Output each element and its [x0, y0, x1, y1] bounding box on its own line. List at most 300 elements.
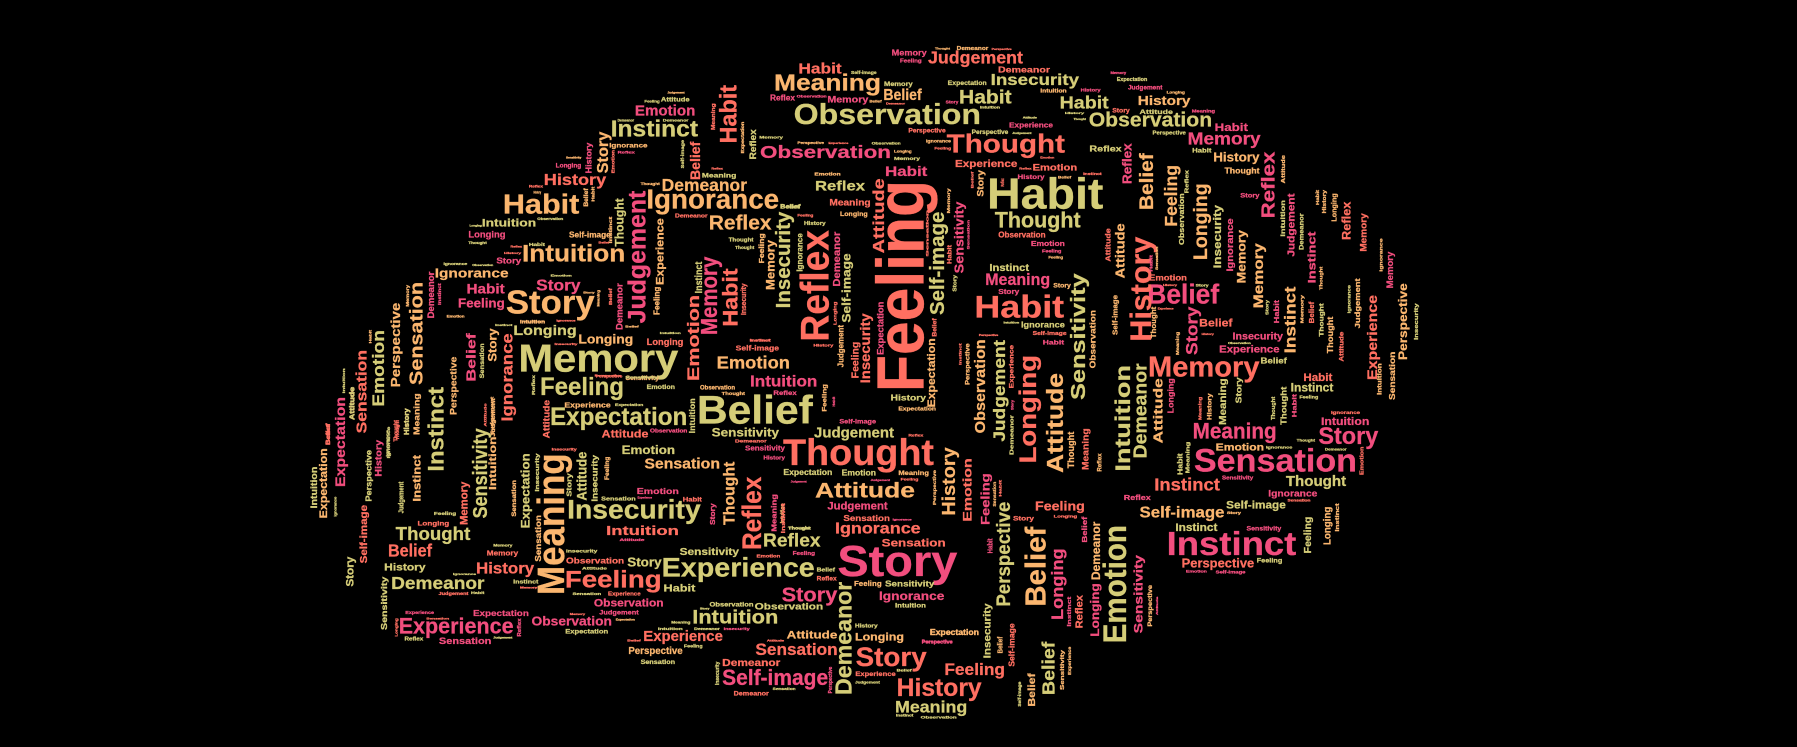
words: lower-left lobe: Observation — [709, 602, 754, 609]
words: lower centre of the brain: Story — [856, 642, 927, 672]
words: lower centre of the brain: Observation — [921, 714, 958, 719]
words: lower centre of the brain: Judgement — [814, 426, 894, 442]
words: centre-right band — [958, 273, 1397, 473]
words: lower-left lobe: Attitude — [573, 452, 589, 501]
words: lower centre of the brain: Intuition — [780, 503, 786, 523]
words: upper-left lobe: Habit — [719, 268, 743, 327]
words: lower centre of the brain: Emotion — [842, 469, 876, 478]
words: lower centre of the brain: Ignorance — [835, 520, 921, 537]
words: centre-right band: Ignorance — [1331, 410, 1361, 415]
words: temporal lobe and cerebellum: Perspective — [1147, 584, 1154, 627]
words: top centre of the brain: Expectation — [875, 301, 885, 355]
words: lower-left lobe: Intuition — [692, 607, 778, 628]
word: Sensation: Sensation — [1194, 442, 1357, 478]
words: top centre of the brain: Longing — [894, 149, 912, 153]
words: centre-right band: Feeling — [1299, 394, 1318, 399]
words: temporal lobe and cerebellum: Sensitivity — [1060, 649, 1066, 690]
words: temporal lobe and cerebellum: Self-image — [1226, 499, 1286, 511]
words: centre-right band: Story — [1010, 400, 1014, 410]
word: Longing: Longing — [1015, 355, 1042, 463]
words: top centre of the brain: Demeanor — [957, 46, 988, 52]
words: centre-left band: Longing — [647, 337, 684, 347]
words: top centre of the brain: Experience — [955, 159, 1018, 170]
words: lower-left lobe: Insecurity — [535, 453, 541, 492]
words: centre-right band: Thought — [1066, 432, 1076, 468]
words: temporal lobe and cerebellum: Feeling — [1257, 558, 1282, 565]
words: temporal lobe and cerebellum: Longing — [1054, 513, 1078, 518]
words: centre-left band: Feeling — [540, 373, 624, 401]
words: centre-left band: Habit — [369, 329, 373, 343]
words: upper-right lobe: Belief — [1309, 301, 1316, 323]
words: lower-left lobe: Perspective — [364, 449, 374, 502]
words: lower-left lobe: Demeanor — [734, 691, 769, 698]
words: centre-left band: Sensitivity — [712, 426, 779, 440]
words: top centre of the brain — [760, 46, 1079, 407]
words: upper-right lobe: Observation — [1179, 193, 1186, 245]
words: centre-left band: Sensitivity — [626, 376, 660, 382]
words: upper-right lobe: Reflex — [1089, 144, 1122, 154]
words: lower-left lobe: Attitude — [620, 537, 646, 542]
words: top centre of the brain: Longing — [840, 211, 868, 218]
words: centre-right band: Emotion — [1216, 443, 1264, 454]
words: top centre of the brain: Memory — [827, 94, 869, 104]
words: centre-left band: Observation — [650, 429, 687, 435]
words: centre-right band: Meaning — [1080, 428, 1090, 470]
words: upper-left lobe: Instinct — [608, 215, 613, 243]
words: top centre of the brain: Ignorance — [926, 139, 951, 144]
words: top centre of the brain: Sensitivity — [951, 201, 966, 273]
words: upper-right lobe: Emotion — [1149, 274, 1187, 283]
words: temporal lobe and cerebellum: Self-image — [1140, 505, 1225, 521]
words: upper-right lobe: History — [1138, 93, 1191, 108]
words: lower-left lobe: Sensation — [601, 496, 636, 503]
words: upper-right lobe: Emotion — [1031, 239, 1065, 248]
words: temporal lobe and cerebellum: Self-image — [1017, 681, 1022, 707]
words: upper-right lobe: Belief — [1136, 152, 1157, 210]
words: upper-left lobe: Longing — [470, 225, 482, 228]
words: top centre of the brain: Feeling — [850, 342, 861, 378]
words: lower-left lobe: Instinct — [412, 454, 424, 502]
words: upper-left lobe: Demeanor — [614, 283, 625, 330]
words: lower centre of the brain: Sensation — [843, 513, 890, 523]
words: lower-left lobe: History — [384, 562, 426, 573]
words: lower-left lobe: Memory — [459, 481, 471, 525]
words: upper-right lobe: History — [1202, 332, 1215, 336]
words: lower centre of the brain: Habit — [831, 396, 836, 407]
words: top centre of the brain: Insecurity — [773, 212, 795, 308]
words: upper-left lobe: Belief — [687, 141, 703, 180]
words: centre-left band: Reflex — [773, 390, 797, 397]
words: lower-left lobe: Sensitivity — [380, 576, 389, 630]
words: centre-left band: Thought — [722, 391, 746, 396]
words: lower-left lobe: Observation — [755, 602, 823, 612]
words: centre-right band: Instinct — [958, 342, 963, 365]
words: top centre of the brain: Story — [953, 275, 959, 292]
words: lower centre of the brain: Expectation — [898, 407, 936, 413]
words: lower centre of the brain: Intuition — [895, 603, 926, 609]
word: Feeling (lower left): Feeling — [565, 567, 662, 593]
words: top centre of the brain: Insecurity — [857, 313, 873, 383]
words: upper-left lobe: Sensitivity — [625, 376, 658, 379]
words: upper-left lobe: History — [504, 251, 522, 255]
words: upper-left lobe: Thought — [641, 182, 661, 186]
words: temporal lobe and cerebellum: Longing — [1089, 583, 1102, 637]
words: centre-right band: Thought — [1280, 386, 1289, 425]
words: centre-left band: Meaning — [411, 393, 421, 435]
words: upper-right lobe: History — [1018, 174, 1045, 181]
words: lower centre of the brain: Sensation — [882, 538, 946, 550]
words: upper-left lobe: Emotion — [610, 149, 616, 173]
words: upper-left lobe: Longing — [468, 230, 506, 240]
words: upper-right lobe: Belief — [1199, 317, 1233, 330]
words: upper-right lobe: Thought — [1149, 306, 1158, 338]
words: centre-right band: Intuition — [1378, 363, 1384, 395]
words: top centre of the brain: Self-image — [927, 212, 949, 315]
words: upper-left lobe: Demeanor — [618, 119, 635, 123]
words: lower-left lobe: Feeling — [605, 456, 611, 480]
words: lower-left lobe: Demeanor — [694, 627, 721, 631]
words: top centre of the brain: Emotion — [814, 172, 841, 177]
words: centre-left band: Attitude — [349, 387, 356, 420]
words: centre-left band: Judgement — [489, 396, 494, 435]
words: temporal lobe and cerebellum: Belief — [1027, 673, 1038, 707]
words: upper-left lobe: Emotion — [635, 104, 695, 119]
word: Habit (left): Habit — [503, 189, 580, 220]
words: lower-left lobe: Insecurity — [715, 661, 721, 685]
words: lower-left lobe: Perspective — [628, 646, 683, 657]
word: Meaning (vertical): Meaning — [530, 453, 573, 595]
words: upper-left lobe: Ignorance — [609, 142, 648, 149]
words: lower-left lobe: Memory — [570, 612, 586, 616]
words: temporal lobe and cerebellum: Feeling — [1303, 517, 1314, 553]
words: lower centre of the brain: Belief — [817, 568, 835, 574]
words: upper-left lobe: Instinct — [495, 323, 514, 327]
words: lower-left lobe: Story — [344, 557, 357, 587]
word: Habit (salmon): Habit — [974, 289, 1064, 324]
words: centre-right band: Reflex — [1097, 453, 1104, 472]
words: upper-right lobe: History — [1081, 87, 1101, 93]
words: lower centre of the brain: Longing — [855, 632, 904, 644]
words: centre-left band: Story — [486, 328, 500, 362]
words: lower centre of the brain: Habit — [999, 479, 1003, 497]
words: top centre of the brain: History — [804, 221, 826, 227]
words: lower-left lobe: Judgement — [398, 481, 405, 513]
words: centre-left band: Insecurity — [552, 448, 577, 452]
words: upper-left lobe: Story — [583, 291, 595, 294]
words: upper-right lobe: Reflex — [1019, 166, 1032, 170]
words: top centre of the brain: Meaning — [829, 198, 871, 208]
words: lower-left lobe: Observation — [532, 615, 612, 629]
words: upper-left lobe: Emotion — [447, 315, 465, 318]
words: upper-left lobe: Reflex — [709, 212, 772, 234]
words: top centre of the brain: Demeanor — [998, 66, 1050, 75]
words: lower centre of the brain: Insecurity — [983, 603, 994, 658]
words: lower-left lobe: Expectation — [318, 448, 330, 518]
words: upper-right lobe: Memory — [1235, 229, 1249, 283]
words: centre-left band: Emotion — [622, 443, 675, 457]
words: upper-left lobe: History — [544, 170, 607, 189]
words: upper-left lobe: Demeanor — [425, 271, 436, 318]
words: upper-left lobe: Memory — [765, 239, 778, 290]
words: temporal lobe and cerebellum: Story — [1227, 511, 1241, 515]
words: top centre of the brain: History — [813, 343, 834, 348]
words: lower-left lobe: Ignorance — [453, 572, 476, 576]
words: upper-right lobe: Habit — [1315, 189, 1320, 205]
words: lower centre of the brain: Self-image — [839, 419, 877, 425]
words: upper-right lobe: Insecurity — [1212, 204, 1224, 268]
words: lower centre of the brain: History — [938, 447, 959, 516]
words: temporal lobe and cerebellum: Ignorance — [1268, 489, 1317, 500]
words: temporal lobe and cerebellum: Story — [1013, 516, 1034, 523]
words: lower-left lobe: Belief — [326, 423, 332, 445]
words: temporal lobe and cerebellum: Reflex — [1124, 493, 1152, 502]
words: upper-right lobe: Habit — [1215, 122, 1248, 134]
words: lower-left lobe: Thought — [788, 526, 812, 530]
words: top centre of the brain: Observation — [797, 94, 827, 98]
words: centre-right band: Thought — [1297, 438, 1316, 443]
words: lower centre of the brain — [750, 374, 1016, 719]
words: temporal lobe and cerebellum: Instinct — [1154, 475, 1220, 495]
words: upper-right lobe: Habit — [1192, 148, 1211, 155]
words: upper-right lobe: Intuition — [1280, 200, 1287, 237]
words: temporal lobe and cerebellum: Belief — [1080, 516, 1089, 543]
words: lower centre of the brain: Meaning — [895, 698, 967, 717]
words: lower-left lobe: Self-image — [358, 505, 369, 563]
words: lower-left lobe: Intuition — [487, 436, 498, 490]
words: lower centre of the brain: Attitude — [787, 629, 837, 641]
word: Belief (pink): Belief — [1147, 279, 1220, 309]
words: upper-right lobe: Intuition — [1003, 320, 1020, 324]
words: lower-left lobe: Reflex — [738, 477, 768, 550]
words: upper-right lobe: Attitude — [1140, 109, 1173, 116]
words: upper-right lobe: Self-image — [1110, 295, 1120, 335]
words: lower centre of the brain: Judgement — [855, 679, 881, 684]
words: lower centre of the brain: Perspective — [922, 639, 953, 645]
words: temporal lobe and cerebellum: Longing — [1323, 507, 1334, 545]
words: lower-left lobe: Experience — [643, 629, 723, 645]
words: centre-left band: Intuition — [688, 398, 697, 433]
words: upper-left lobe: Story — [594, 131, 612, 173]
words: top centre of the brain: Insecurity — [991, 72, 1079, 89]
words: upper-left lobe: Expectation — [740, 121, 745, 153]
words: centre-left band: Belief — [326, 425, 332, 445]
words: upper-right lobe: Story — [1183, 306, 1202, 355]
words: lower-left lobe: Expectation — [565, 628, 608, 635]
words: upper-left lobe: History — [584, 142, 594, 173]
words: upper-left lobe: Memory — [759, 135, 784, 139]
words: centre-right band: Meaning — [1198, 396, 1203, 420]
words: upper-left lobe: Habit — [590, 186, 596, 202]
words: top centre of the brain: Reflex — [770, 94, 796, 103]
words: centre-left band: Perspective — [449, 357, 459, 415]
words: lower-left lobe: Habit — [664, 583, 696, 594]
words: upper-right lobe: Instinct — [1083, 172, 1103, 176]
words: top centre of the brain: Memory — [946, 188, 951, 213]
words: centre-right band: Observation — [1088, 310, 1098, 368]
words: upper-left lobe: Thought — [735, 245, 755, 251]
words: centre-left band: Longing — [578, 331, 633, 346]
words: upper-right lobe: Perspective — [1397, 283, 1410, 360]
words: temporal lobe and cerebellum: Instinct — [1335, 503, 1341, 532]
words: top centre of the brain: Belief — [780, 203, 802, 210]
words: upper-right lobe: Feeling — [1042, 249, 1061, 255]
words: top centre of the brain: Judgement — [836, 325, 845, 367]
words: lower-left lobe: Thought — [396, 524, 471, 545]
words: centre-right band: Story — [1234, 377, 1244, 403]
words: upper-right lobe: Perspective — [1153, 131, 1186, 137]
words: lower-left lobe: Story — [627, 556, 662, 569]
words: lower centre of the brain: Expectation — [783, 468, 832, 477]
words: temporal lobe and cerebellum: Emotion — [1360, 447, 1366, 475]
words: upper-right lobe: Habit — [1272, 299, 1281, 323]
words: temporal lobe and cerebellum: Attitude — [1155, 596, 1159, 615]
words: upper-right lobe: Ignorance — [1378, 238, 1384, 272]
words: lower centre of the brain: Sensitivity — [885, 579, 935, 589]
words: lower-left lobe: Observation — [594, 598, 664, 609]
words: upper-right lobe: Experience — [1219, 345, 1280, 356]
words: top centre of the brain: Belief — [933, 318, 939, 337]
words: lower centre of the brain: Judgement — [827, 500, 888, 512]
words: top centre of the brain: Experience — [1009, 120, 1053, 129]
words: upper-left lobe: Feeling — [458, 297, 505, 310]
words: upper-right lobe: Attitude — [1113, 223, 1128, 278]
word: Belief (vertical): Belief — [1020, 526, 1052, 607]
words: centre-right band: Instinct — [1291, 381, 1333, 395]
words: lower-left lobe: Judgement — [439, 591, 469, 597]
words: centre-left band: Ignorance — [499, 333, 516, 422]
words: upper-left lobe: Experience — [654, 218, 667, 285]
words: upper-right lobe: Longing — [1332, 193, 1339, 222]
words: upper-left lobe: Habit — [715, 84, 742, 143]
words: upper-right lobe: Instinct — [1306, 231, 1319, 283]
words: centre-left band: Self-image — [736, 344, 779, 353]
words: upper-right lobe: Attitude — [1339, 331, 1346, 362]
words: temporal lobe and cerebellum: Sensitivity — [1132, 554, 1146, 633]
words: top centre of the brain: Reflex — [1000, 178, 1005, 187]
words: top centre of the brain: Perspective — [972, 130, 1009, 136]
word: Reflex: Reflex — [793, 230, 837, 342]
words: temporal lobe and cerebellum: Sensitivity — [1247, 526, 1282, 533]
words: centre-left band: Perspective — [596, 374, 623, 379]
words: upper-left lobe: Reflex — [618, 150, 636, 154]
words: top centre of the brain: Expectation — [948, 80, 987, 87]
words: centre-left band: Attitude — [602, 428, 648, 440]
words: upper-left lobe: Instinct — [611, 117, 698, 142]
word: History (vertical): History — [1125, 237, 1158, 342]
words: upper-right lobe: Story — [1240, 192, 1260, 199]
words: top centre of the brain: Self-image — [840, 253, 854, 323]
words: upper-right lobe: Self-image — [1033, 331, 1067, 337]
words: lower-left lobe: History — [373, 440, 384, 477]
word: Habit (large): Habit — [987, 170, 1104, 218]
words: temporal lobe and cerebellum: Sensation — [1288, 499, 1310, 503]
words: lower-left lobe: Habit — [471, 590, 485, 595]
words: upper-right lobe: Memory — [1299, 294, 1305, 323]
word: Expectation: Expectation — [550, 404, 687, 431]
words: lower-left lobe: Perspective — [828, 666, 834, 693]
words: top centre of the brain: Ignorance — [796, 233, 805, 272]
words: top centre of the brain: Story — [975, 169, 985, 197]
words: lower centre of the brain: Self-image — [1007, 623, 1016, 667]
word: Story (left): Story — [506, 284, 595, 321]
words: centre-right band: Experience — [1008, 345, 1015, 388]
word: Experience: Experience — [662, 553, 815, 583]
words: top centre of the brain: Feeling — [797, 214, 813, 218]
words: upper-right lobe: Belief — [1058, 174, 1072, 179]
words: temporal lobe and cerebellum: Experience — [1067, 646, 1072, 675]
words: lower centre of the brain: Thought — [788, 525, 811, 530]
words: top centre of the brain: Observation — [872, 142, 901, 146]
words: lower centre of the brain: History — [897, 675, 982, 702]
words: upper-left lobe: Observation — [537, 217, 563, 221]
words: upper-left lobe: Belief — [780, 205, 800, 210]
words: top centre of the brain: Perspective — [797, 141, 824, 145]
words: top centre of the brain: Sensation — [925, 210, 929, 257]
words: upper-right lobe: Observation — [1228, 341, 1251, 345]
words: centre-left band: Reflex — [531, 374, 536, 395]
words: centre-left band: Instinct — [423, 386, 448, 472]
words: upper-left lobe: Insecurity — [741, 283, 748, 315]
words: lower-left lobe: Memory — [520, 586, 538, 589]
words: top centre of the brain: Experience — [828, 141, 849, 145]
words: lower-left lobe: Sensation — [572, 591, 602, 596]
words: upper-left lobe: Longing — [556, 163, 581, 169]
words: temporal lobe and cerebellum: Instinct — [1175, 522, 1218, 534]
words: upper-right lobe: Reflex — [1340, 201, 1354, 240]
words: upper-left lobe: Habit — [529, 242, 545, 248]
words: upper-left lobe: Reflex — [711, 167, 723, 170]
words: centre-left band: Instinct — [750, 338, 771, 343]
words: centre-left band: Emotion — [647, 385, 675, 391]
words: upper-left lobe: Reflex — [748, 129, 758, 159]
words: upper-left lobe: Story — [536, 276, 581, 294]
words: upper-right lobe: Ignorance — [1225, 218, 1235, 272]
words: top centre of the brain: Memory — [894, 156, 920, 162]
words: upper-right lobe: Attitude — [1103, 228, 1113, 262]
words: centre-left band: Emotion — [369, 330, 388, 407]
words: lower-left lobe: Insecurity — [724, 626, 750, 631]
words: upper-right lobe: Attitude — [1023, 116, 1038, 119]
words: centre-right band: Perspective — [965, 343, 971, 385]
words: upper-right lobe: Memory — [1188, 129, 1261, 148]
words: upper-right lobe: Attitude — [1281, 155, 1287, 183]
words: upper-left lobe: Insecurity — [554, 342, 578, 346]
words: upper-right lobe: Sensation — [1155, 247, 1159, 270]
words: lower centre of the brain: Instinct — [896, 714, 915, 718]
words: upper-right lobe: Emotion — [1040, 155, 1054, 159]
words: upper-left lobe: Judgement — [667, 91, 685, 94]
words: lower centre of the brain: Judgement — [791, 479, 807, 483]
words: lower-left lobe: Sensation — [641, 659, 675, 666]
words: lower centre of the brain: Sensation — [992, 482, 997, 507]
words: centre-left band: Sensation — [480, 343, 486, 378]
words: upper-left lobe: Belief — [584, 188, 590, 207]
words: lower-left lobe: Belief — [627, 639, 641, 643]
word: Memory (salmon): Memory — [1148, 352, 1260, 383]
words: upper-right lobe: Story — [1053, 282, 1071, 289]
words: upper-right lobe: Meaning — [1192, 109, 1215, 115]
words: upper-right lobe: Feeling — [1162, 165, 1181, 227]
words: centre-right band: Intuition — [1321, 416, 1369, 428]
words: lower-left lobe: Expectation — [473, 609, 529, 618]
words: upper-left lobe: Attitude — [661, 97, 690, 104]
word: Intuition (vertical): Intuition — [1111, 365, 1135, 472]
words: upper-right lobe: Memory — [1385, 252, 1395, 288]
words: lower-left lobe: Judgement — [599, 609, 639, 616]
words: lower-left lobe: Observation — [566, 556, 624, 565]
words: centre-left band: Intuition — [341, 367, 346, 393]
words: centre-right band: Thought — [1271, 396, 1277, 420]
